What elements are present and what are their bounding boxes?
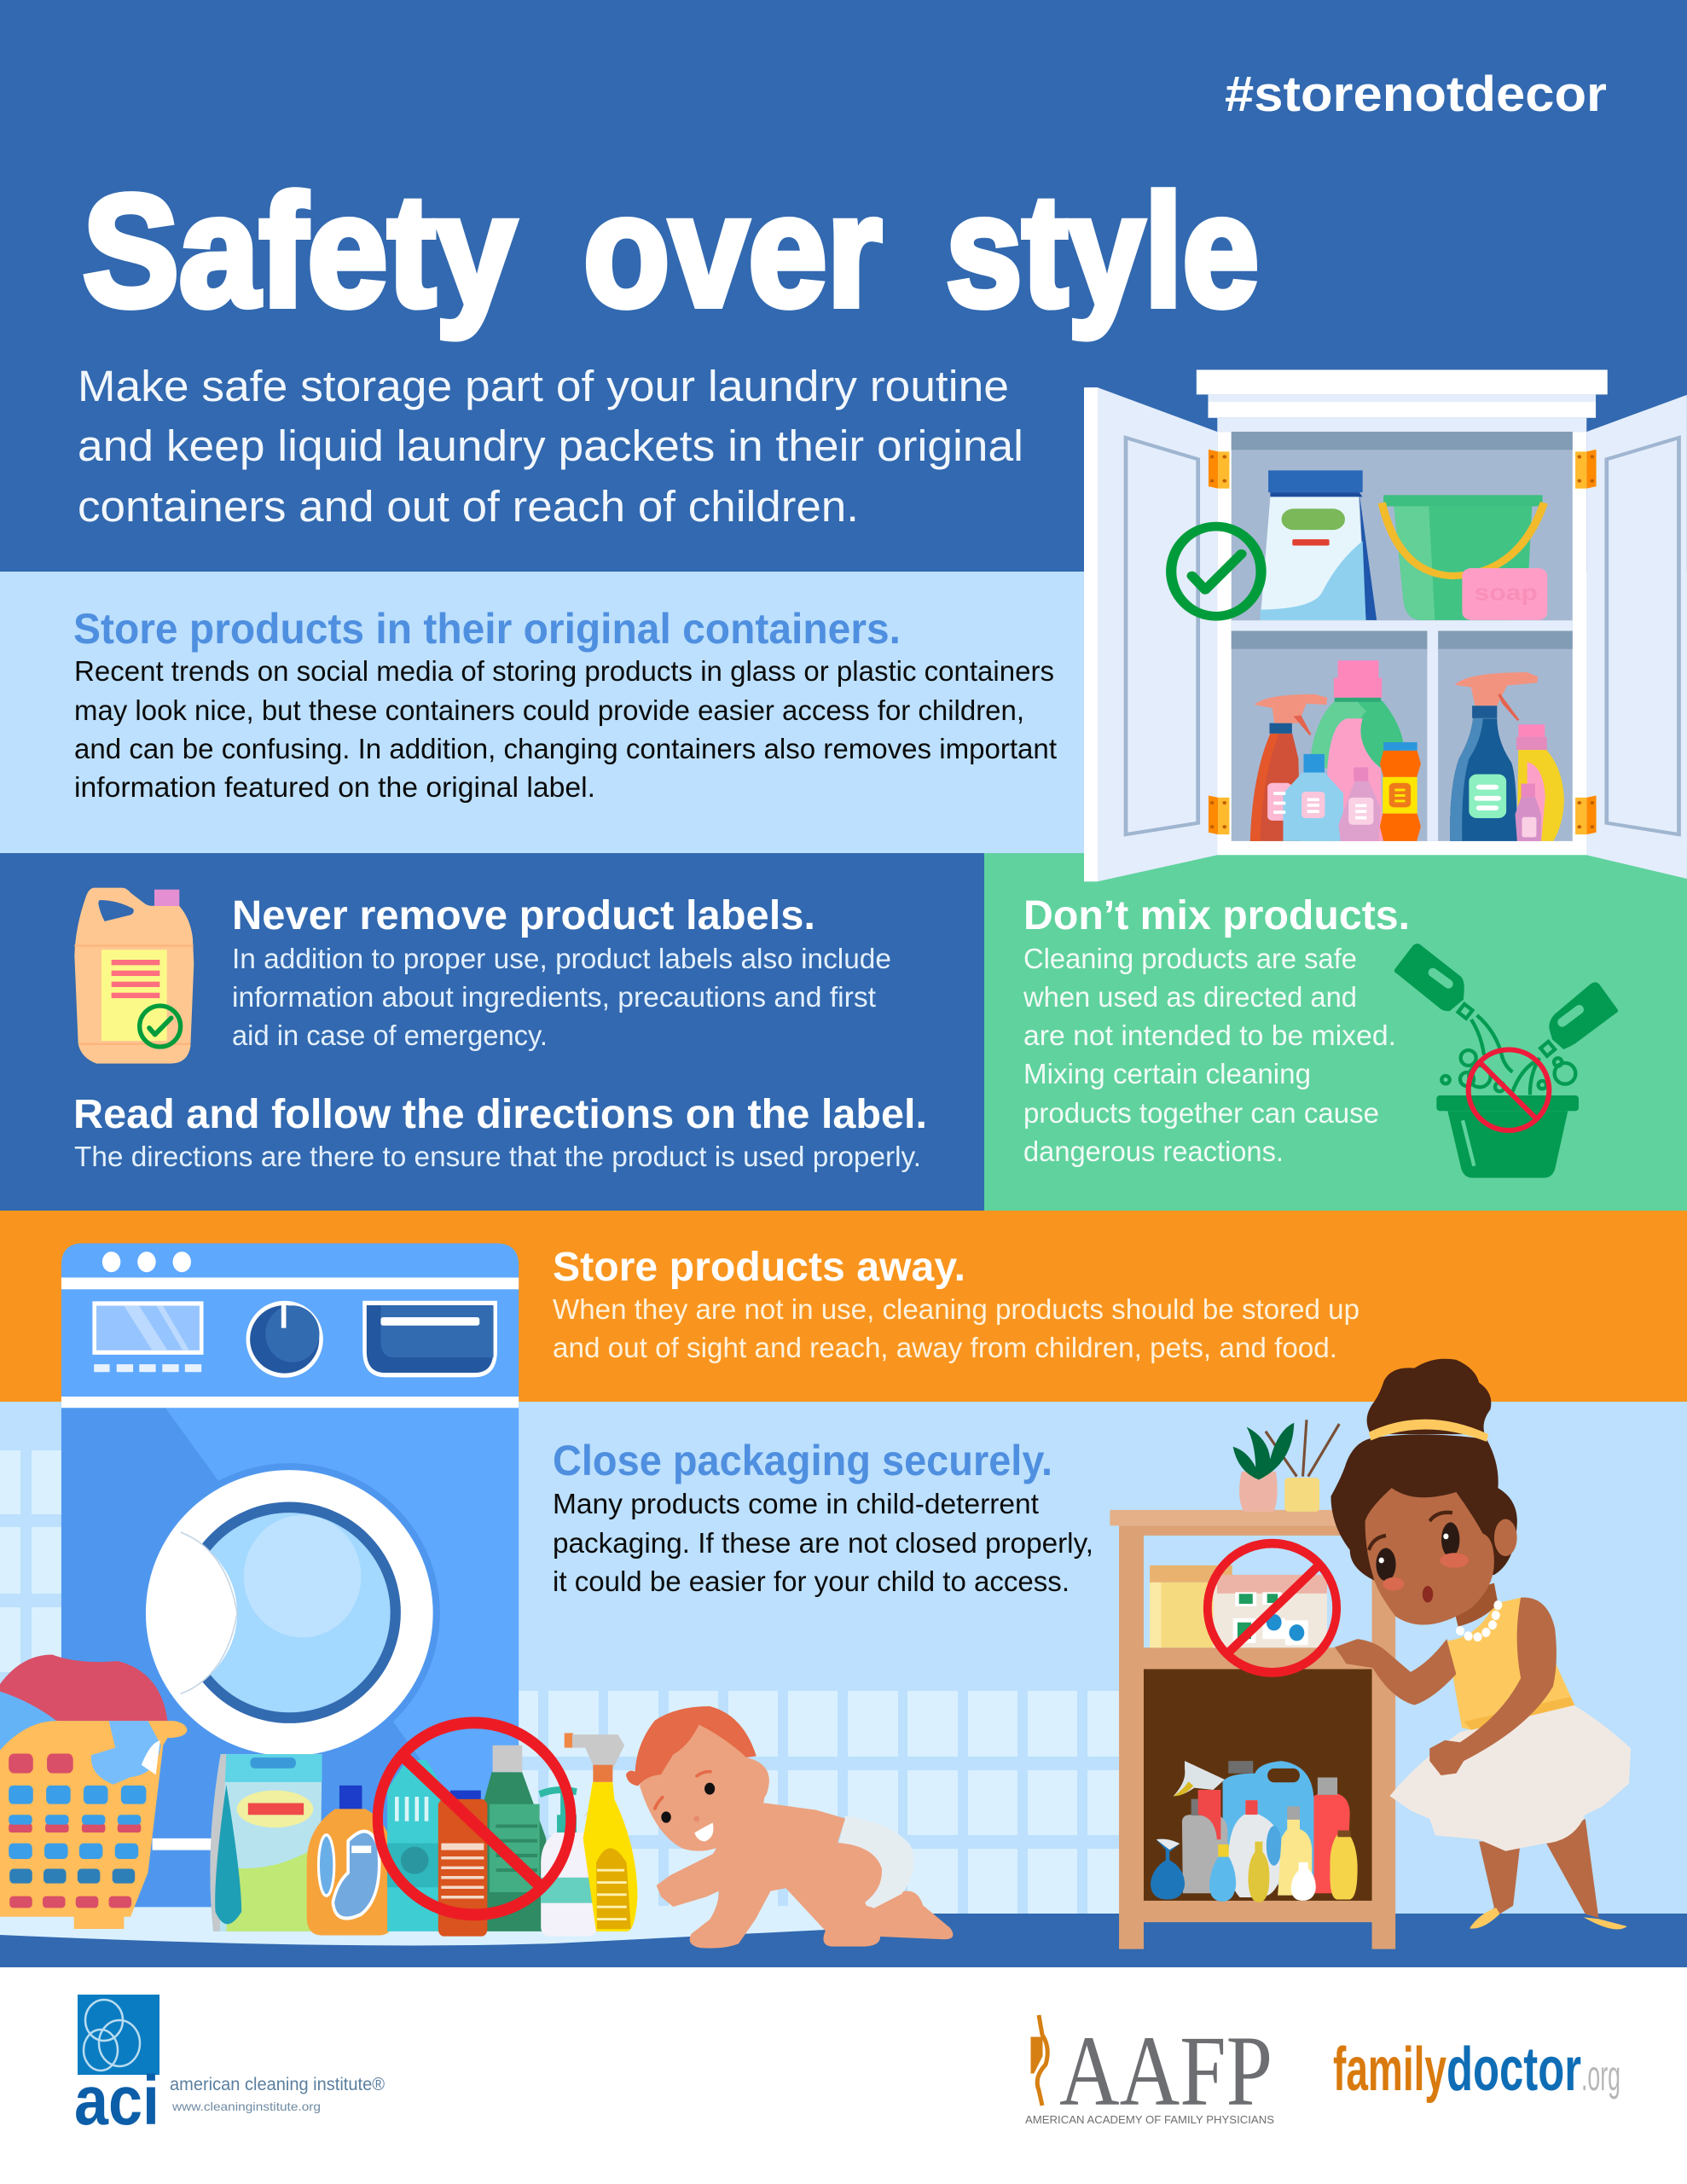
AAFP letters: AAFP bbox=[1059, 2015, 1272, 2127]
bottles left bbox=[1250, 660, 1421, 841]
shelf bbox=[1110, 1510, 1395, 1949]
aci name: american cleaning institute® bbox=[170, 2075, 385, 2094]
heading: never remove: Never remove product labels. bbox=[232, 893, 815, 938]
laundry in basket bbox=[0, 1655, 167, 1751]
body: store products: may look nice, but these containers could provide easier access for children, bbox=[74, 694, 1024, 726]
illustration: child at shelf bbox=[1110, 1359, 1631, 1949]
icon: prohibited sign over products bbox=[378, 1722, 571, 1914]
panel: labels background bbox=[0, 853, 984, 1211]
logo: familydoctor.org: doctor bbox=[1446, 2036, 1581, 2104]
heading: read directions: Read and follow the directions on the label. bbox=[73, 1092, 927, 1137]
cabinet door left bbox=[1084, 387, 1217, 881]
baby head bbox=[626, 1706, 769, 1851]
panel: store away band bbox=[0, 1211, 1687, 1402]
text block: do not mix bbox=[1023, 893, 1410, 1167]
baby body bbox=[657, 1803, 882, 1949]
icon: mixing bottles with no sign bbox=[1394, 944, 1618, 1178]
body: store away: When they are not in use, cleaning products should be stored up bbox=[553, 1293, 1359, 1325]
cabinet door right bbox=[1586, 395, 1687, 879]
body: do not mix: Cleaning products are safe bbox=[1023, 943, 1357, 974]
intro text: containers and out of reach of children. bbox=[78, 482, 859, 531]
baby diaper bbox=[839, 1815, 913, 1908]
body: do not mix: dangerous reactions. bbox=[1023, 1136, 1284, 1167]
heading: do not mix: Don’t mix products. bbox=[1023, 893, 1410, 938]
product bag bbox=[210, 1754, 322, 1931]
body: do not mix: products together can cause bbox=[1023, 1097, 1379, 1129]
soap: soap bbox=[1474, 580, 1538, 606]
text block: close packaging bbox=[553, 1437, 1093, 1597]
girl head and hair bbox=[1330, 1359, 1517, 1637]
floor bbox=[0, 1914, 1687, 1967]
bottles on lower shelf bbox=[1151, 1761, 1358, 1902]
panel: nursery scene wall bbox=[0, 1402, 1687, 1931]
green bottle bbox=[483, 1745, 546, 1931]
cabinet frame bbox=[1197, 369, 1608, 855]
illustration: crawling baby bbox=[626, 1706, 953, 1949]
storage boxes with pods bbox=[1150, 1565, 1327, 1647]
aci website: www.cleaninginstitute.org bbox=[171, 2100, 321, 2113]
red bottle bbox=[438, 1791, 487, 1937]
teal bottle bbox=[387, 1760, 443, 1931]
detergent bag bbox=[1261, 470, 1377, 620]
aci letters: aci bbox=[74, 2062, 159, 2140]
AAFP full name: AMERICAN ACADEMY OF FAMILY PHYSICIANS bbox=[1025, 2114, 1274, 2126]
icon: green check bbox=[1171, 526, 1261, 616]
body: close packaging bbox=[553, 1488, 1093, 1597]
bottles right bbox=[1450, 672, 1564, 841]
text block: store in original containers bbox=[73, 605, 1057, 803]
body: never remove: aid in case of emergency. bbox=[232, 1019, 548, 1051]
body: store products: information featured on the original label. bbox=[74, 771, 595, 803]
AAFP staff icon bbox=[1031, 2015, 1047, 2106]
title: over bbox=[583, 163, 882, 340]
text block: read directions bbox=[73, 1092, 927, 1172]
soap pump bottle bbox=[540, 1790, 597, 1937]
body: store products: Recent trends on social media of storing products in glass or plastic containers bbox=[74, 655, 1054, 687]
body: do not mix: are not intended to be mixed. bbox=[1023, 1019, 1396, 1051]
soap bbox=[1462, 568, 1547, 620]
title: style bbox=[946, 163, 1259, 340]
body: close packaging: packaging. If these are not closed properly, bbox=[553, 1527, 1093, 1559]
body: never remove: information about ingredients, precautions and first bbox=[232, 981, 876, 1013]
intro text bbox=[78, 362, 1023, 531]
body: store away: and out of sight and reach, away from children, pets, and food. bbox=[553, 1332, 1337, 1363]
pot plant and vase bbox=[1233, 1420, 1339, 1512]
body: do not mix bbox=[1023, 943, 1396, 1167]
hinges bbox=[1209, 450, 1597, 834]
aci emblem bbox=[78, 1995, 159, 2075]
bucket bbox=[1382, 495, 1544, 620]
hashtag: #storenotdecor bbox=[1225, 67, 1607, 122]
logo: familydoctor.org: family bbox=[1333, 2036, 1446, 2104]
body: do not mix: Mixing certain cleaning bbox=[1023, 1058, 1311, 1089]
logo: AAFP bbox=[1025, 2015, 1274, 2127]
heading: store products: Store products in their original containers. bbox=[73, 605, 901, 653]
text block: store away bbox=[553, 1245, 1359, 1363]
logo: american cleaning institute bbox=[74, 1995, 385, 2140]
illustration: washing machine and laundry scene bbox=[0, 1243, 637, 1937]
panel: header background bbox=[0, 0, 1687, 572]
body: store products bbox=[74, 655, 1057, 803]
heading: store away: Store products away. bbox=[553, 1245, 965, 1290]
title bbox=[83, 163, 1259, 340]
body: store away bbox=[553, 1293, 1359, 1363]
baby rear leg bbox=[865, 1891, 953, 1939]
body: never remove: In addition to proper use, product labels also include bbox=[232, 943, 891, 974]
panel: do not mix background bbox=[984, 853, 1687, 1211]
body: do not mix: when used as directed and bbox=[1023, 981, 1357, 1013]
intro text: and keep liquid laundry packets in their original bbox=[78, 421, 1023, 470]
logo: familydoctor.org bbox=[1333, 2036, 1620, 2104]
text block: never remove labels bbox=[232, 893, 891, 1051]
girl arms bbox=[1335, 1597, 1557, 1775]
body: read directions: The directions are there to ensure that the product is used properly. bbox=[74, 1141, 921, 1172]
laundry basket bbox=[0, 1721, 187, 1929]
body: store products: and can be confusing. In addition, changing containers also removes important bbox=[74, 733, 1057, 764]
body: close packaging: Many products come in child-deterrent bbox=[553, 1488, 1039, 1519]
icon: labelled jug with check bbox=[74, 888, 194, 1064]
yellow spray bottle bbox=[565, 1733, 637, 1931]
orange detergent jug bbox=[307, 1786, 394, 1936]
logo: familydoctor.org: .org bbox=[1581, 2052, 1620, 2100]
girl dress bbox=[1446, 1598, 1574, 1730]
heading: close packaging: Close packaging securely. bbox=[553, 1437, 1052, 1484]
body: never remove bbox=[232, 943, 891, 1051]
illustration: open cabinet bbox=[1084, 369, 1687, 881]
intro text: Make safe storage part of your laundry routine bbox=[78, 362, 1009, 410]
girl skirt bbox=[1389, 1705, 1631, 1851]
washing machine bbox=[61, 1243, 519, 1907]
icon: prohibited sign over pods bbox=[1208, 1543, 1336, 1672]
title: Safety bbox=[83, 163, 516, 340]
wall tiles bbox=[0, 1450, 1120, 1949]
body: close packaging: it could be easier for your child to access. bbox=[553, 1565, 1070, 1597]
panel: store in original containers background bbox=[0, 572, 1687, 853]
girl legs and shoes bbox=[1470, 1819, 1627, 1930]
